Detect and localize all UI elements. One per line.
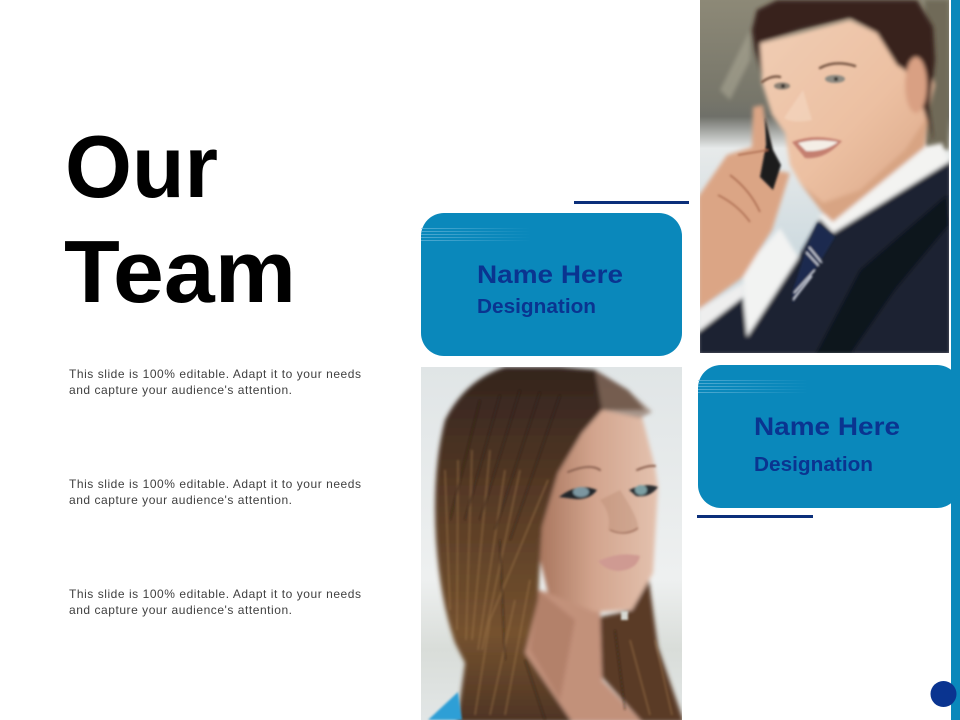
suit (698, 160, 951, 355)
cuff (698, 283, 743, 332)
hair streaks (445, 450, 672, 715)
shirt (743, 228, 800, 345)
title: Team (64, 222, 296, 321)
hair (435, 367, 645, 720)
phone (760, 117, 781, 190)
text block 3: and capture your audience's attention. (69, 603, 292, 617)
text block 3: This slide is 100% editable. Adapt it to your needs (69, 587, 361, 601)
collar (818, 143, 949, 233)
photo: woman (421, 367, 684, 720)
text block 2: This slide is 100% editable. Adapt it to your needs (69, 477, 361, 491)
text block 1: This slide is 100% editable. Adapt it to your needs (69, 367, 361, 381)
accent line top (574, 201, 689, 204)
title (64, 117, 296, 321)
neck (525, 590, 642, 720)
neck and face (801, 117, 932, 224)
eyes (559, 487, 597, 499)
title: Our (65, 117, 218, 216)
name 1: Name Here (477, 261, 623, 289)
ear (905, 57, 927, 113)
text block 1: and capture your audience's attention. (69, 383, 292, 397)
nose (600, 490, 638, 534)
facial features (762, 63, 855, 82)
panel: right edge bar (951, 0, 960, 720)
accent line bottom (697, 515, 813, 518)
designation 1: Designation (477, 296, 596, 318)
designation 2: Designation (754, 454, 873, 476)
blue top (428, 692, 462, 720)
photo: man on phone (698, 0, 951, 355)
brows (568, 466, 655, 472)
text block 2: and capture your audience's attention. (69, 493, 292, 507)
hair (752, 0, 935, 140)
lips (598, 554, 640, 571)
tie (792, 223, 835, 303)
name 2: Name Here (754, 413, 900, 441)
hair back right (600, 573, 684, 720)
panel: name card 1 (421, 213, 682, 356)
panel: name card 2 (698, 365, 960, 508)
face (540, 410, 658, 612)
badge circle (930, 681, 956, 707)
earring (621, 611, 628, 620)
hand (698, 105, 790, 310)
finger lines (718, 150, 768, 222)
